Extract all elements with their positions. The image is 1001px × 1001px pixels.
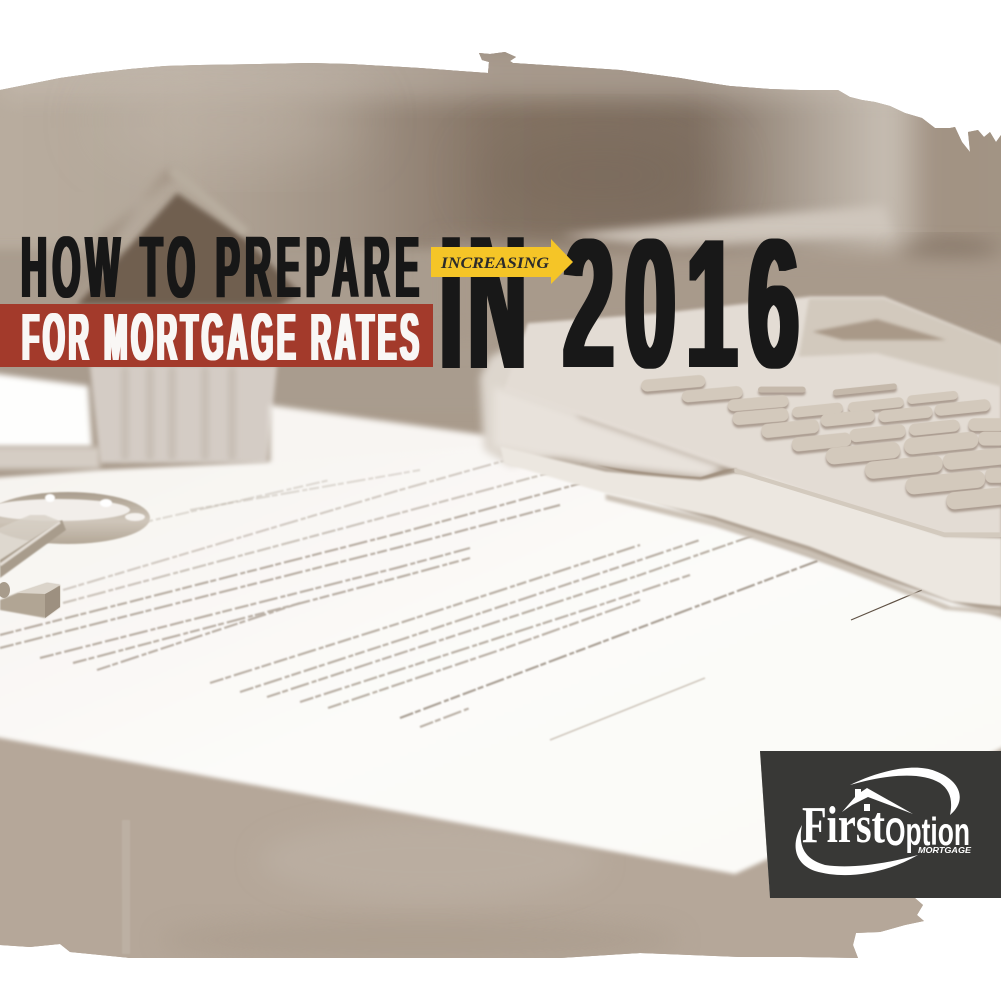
dark shadow right (900, 242, 1000, 274)
red banner (0, 304, 433, 367)
calculator shadow crescent (595, 465, 738, 480)
table wood at bottom (0, 730, 1001, 970)
pale table band (560, 206, 893, 250)
wall behind desk (0, 52, 1001, 256)
logo roof (842, 788, 913, 814)
white sheet right of house (267, 402, 488, 464)
white block left of house (0, 373, 92, 447)
calculator base shadow (606, 494, 1001, 615)
calculator front face (494, 387, 724, 478)
keys (0, 492, 150, 618)
logo wordmark Mortgage: MORTGAGE (918, 846, 972, 855)
arrow label: INCREASING (440, 255, 549, 272)
tabletop left (0, 248, 431, 268)
calculator left glow (476, 348, 578, 468)
calculator base (501, 447, 1001, 606)
logo panel (760, 751, 1001, 898)
title line two: FOR MORTGAGE RATES (22, 299, 419, 374)
title line one: HOW TO PREPARE (21, 220, 419, 317)
calculator display (812, 319, 946, 340)
strip below block (0, 447, 100, 469)
table middle (460, 236, 1001, 284)
calculator (480, 297, 1001, 615)
paper document (0, 445, 1001, 874)
logo swoosh bottom (796, 825, 918, 875)
logo swoosh top (850, 768, 960, 815)
calculator top surface (504, 297, 1001, 536)
wooden house model (70, 170, 300, 463)
signature lines (851, 590, 922, 620)
calculator rim (734, 468, 1001, 537)
yellow arrow (431, 239, 573, 284)
document text lines (0, 445, 820, 727)
big word IN: IN (440, 196, 526, 408)
calculator top right shading (799, 298, 1001, 387)
logo wordmark First: First (802, 797, 886, 854)
big year 2016: 2016 (563, 200, 799, 406)
calculator keys (641, 375, 1001, 510)
logo window (864, 804, 870, 811)
